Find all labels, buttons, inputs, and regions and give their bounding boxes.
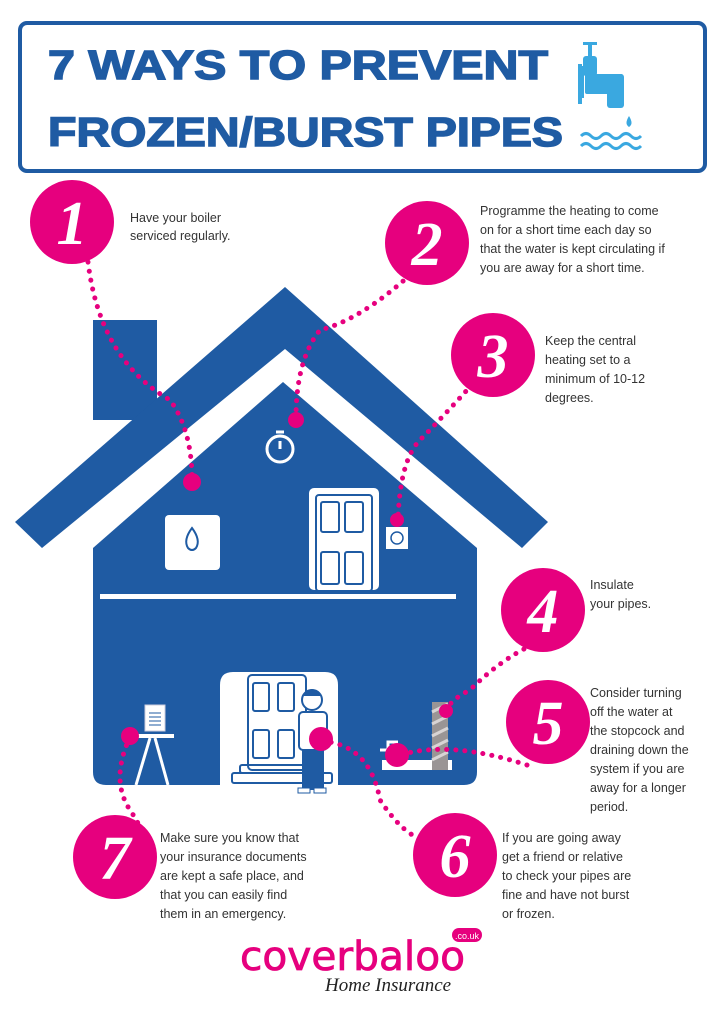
- step 4: your pipes.: [590, 597, 651, 611]
- step 2: on for a short time each day so: [480, 223, 652, 237]
- title: 7 WAYS TO PREVENT: [48, 42, 548, 88]
- step 7: them in an emergency.: [160, 907, 286, 921]
- title: FROZEN/BURST PIPES: [48, 109, 563, 155]
- step 4: 4: [526, 578, 558, 646]
- step 6: fine and have not burst: [502, 888, 630, 902]
- title box: [20, 23, 705, 171]
- step 6: get a friend or relative: [502, 850, 623, 864]
- lower doorway with person: [220, 672, 338, 793]
- connector dots: [121, 412, 453, 767]
- step 7: are kept a safe place, and: [160, 869, 304, 883]
- step 5: 5: [532, 690, 564, 758]
- pipe and stopcock: [380, 702, 452, 770]
- step 1: [30, 180, 231, 264]
- step 7: that you can easily find: [160, 888, 287, 902]
- step 7: Make sure you know that: [160, 831, 299, 845]
- step 2: Programme the heating to come: [480, 204, 659, 218]
- step 6: or frozen.: [502, 907, 555, 921]
- dotted connectors: [88, 262, 532, 842]
- house body: [93, 382, 477, 785]
- step 3: 3: [476, 323, 508, 391]
- step 6: [413, 813, 631, 921]
- upper door: [308, 487, 380, 591]
- step 6: If you are going away: [502, 831, 622, 845]
- step 1: 1: [56, 190, 88, 258]
- floor line: [100, 594, 456, 599]
- step 5: draining down the: [590, 743, 689, 757]
- step 2: 2: [410, 211, 442, 279]
- step 5: Consider turning: [590, 686, 682, 700]
- house: [15, 287, 548, 793]
- logo: coverbaloo: [240, 934, 465, 980]
- step 7: 7: [100, 825, 134, 893]
- step 3: degrees.: [545, 391, 594, 405]
- step 5: off the water at: [590, 705, 673, 719]
- step 3: [451, 313, 645, 405]
- step 2: you are away for a short time.: [480, 261, 645, 275]
- step 7: [73, 815, 307, 921]
- step 5: period.: [590, 800, 628, 814]
- step 6: 6: [440, 823, 470, 891]
- logo: [240, 928, 482, 996]
- step 5: system if you are: [590, 762, 685, 776]
- roof: [15, 287, 548, 548]
- title: [48, 42, 563, 155]
- step 4: Insulate: [590, 578, 634, 592]
- step 5: away for a longer: [590, 781, 686, 795]
- step 7: your insurance documents: [160, 850, 307, 864]
- logo: Home Insurance: [324, 975, 451, 996]
- icon: stopwatch: [267, 432, 293, 462]
- table with document: [128, 705, 174, 785]
- logo: .co.uk: [455, 931, 480, 941]
- step 4: [501, 568, 651, 652]
- step 3: heating set to a: [545, 353, 631, 367]
- icon: tap with water: [578, 42, 641, 148]
- step 1: serviced regularly.: [130, 229, 231, 243]
- step 2: [385, 201, 665, 285]
- step 5: [506, 680, 689, 814]
- chimney: [93, 320, 157, 420]
- step 6: to check your pipes are: [502, 869, 631, 883]
- step 3: Keep the central: [545, 334, 636, 348]
- step 1: Have your boiler: [130, 211, 221, 225]
- step 2: that the water is kept circulating if: [480, 242, 665, 256]
- step 3: minimum of 10-12: [545, 372, 645, 386]
- icon: boiler: [165, 515, 220, 570]
- step 5: the stopcock and: [590, 724, 685, 738]
- thermostat: [386, 527, 408, 549]
- person: [298, 689, 327, 793]
